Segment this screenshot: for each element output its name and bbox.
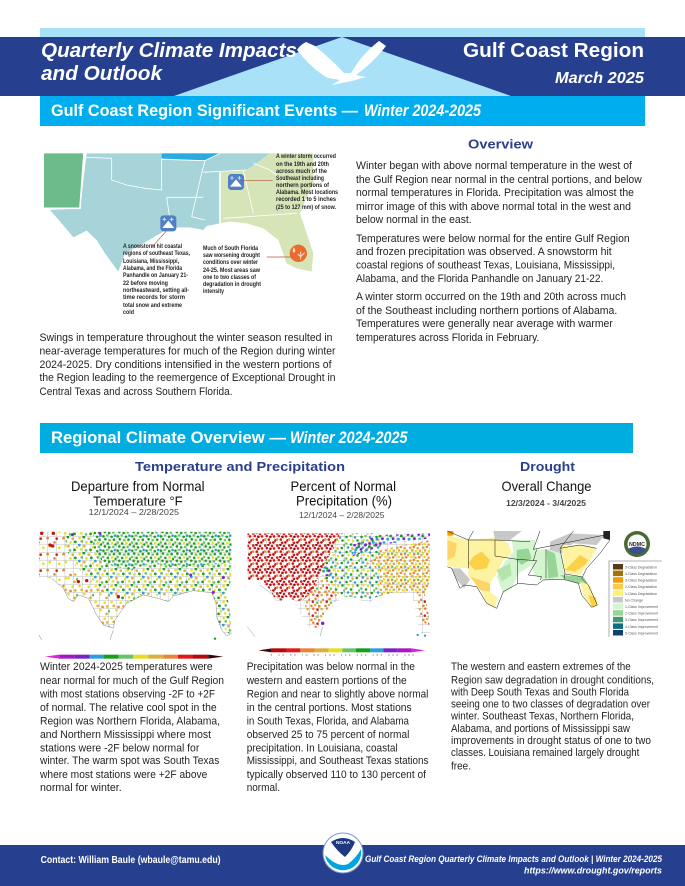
text: precipitation summary: typically observed 110 to 130 percent of: [247, 769, 427, 781]
text: drought summary: Alabama, and portions of Mississippi saw: [451, 723, 631, 735]
icon: NOAA logo: [323, 833, 363, 873]
callout: winter storm: recorded 1 to 5 inches: [276, 197, 337, 203]
text: overview: coastal regions of southeast Texas, Louisiana, Mississippi,: [356, 260, 615, 272]
text: overview: of the Southeast including northern portions of Alabama.: [356, 305, 617, 317]
callout: South Florida drought: one to two classes of: [203, 275, 257, 281]
text: drought summary: Region saw degradation in drought conditions,: [451, 674, 654, 686]
callout: South Florida drought: conditions over winter: [203, 260, 259, 266]
text: overview: Temperatures were below normal for the entire Gulf Region: [356, 233, 630, 245]
text: precipitation summary: Region and near to slightly above normal: [247, 688, 428, 700]
legend: drought classes: 4-Class Degradation: [625, 571, 657, 576]
region and date: March 2025: [555, 70, 645, 87]
callout: snowstorm: [123, 244, 190, 316]
text: drought summary: winter. Southeast Texas, Northern Florida,: [450, 710, 634, 722]
callout: winter storm: on the 19th and 20th: [276, 162, 329, 168]
legend: precipitation colour bar: 5 25 50 70 90 100 110 130 150 200 300: [271, 653, 414, 657]
callout: winter storm: Alabama. Most locations: [276, 190, 339, 196]
text: drought summary: The western and eastern extremes of the: [451, 661, 631, 673]
region and date: [463, 40, 645, 87]
text: precipitation summary: Mississippi, and Southeast Texas stations: [247, 755, 429, 767]
heading: significant events: [40, 96, 645, 126]
heading: regional climate overview: Winter 2024-2025: [290, 429, 408, 447]
callout: South Florida drought: 24-25. Most areas saw: [203, 268, 260, 274]
legend: precipitation colour bar: [258, 648, 425, 657]
heading: significant events: Winter 2024-2025: [364, 102, 482, 120]
chart title: temperature: [71, 478, 204, 517]
report title and link: [365, 854, 663, 876]
text: winter summary: near-average temperatures for much of the Region during winter: [40, 346, 336, 358]
callout: winter storm: (25 to 127 mm) of snow.: [276, 205, 336, 211]
chart title: drought: [502, 478, 592, 508]
text: overview: the Gulf Region near normal in the central portions, and below: [356, 174, 642, 186]
text: overview: and frozen precipitation was observed. A snowstorm hit: [356, 246, 612, 258]
region and date: Gulf Coast Region: [463, 40, 644, 62]
text: precipitation summary: normal.: [247, 782, 280, 794]
text: precipitation summary: precipitation. In Louisiana, coastal: [247, 742, 398, 754]
callout: snowstorm: time records for storm: [123, 295, 185, 301]
callout: snowstorm: A snowstorm hit coastal: [123, 244, 182, 250]
legend: drought classes: 2-Class Degradation: [625, 584, 657, 589]
legend: drought classes: 3-Class Improvement: [625, 617, 659, 622]
text: drought summary: free.: [451, 760, 471, 772]
heading: drought: Drought: [520, 459, 576, 474]
text: overview: Temperatures were generally near average with warmer: [356, 318, 613, 330]
text: precipitation summary: [246, 661, 429, 794]
text: precipitation summary: in South Texas, Florida, and Alabama: [247, 716, 410, 728]
chart title: precipitation: Percent of Normal: [290, 478, 396, 494]
text: overview: below normal in the east.: [356, 214, 472, 226]
icon: snow, Alabama: [228, 174, 244, 190]
chart title: precipitation: [290, 478, 396, 520]
legend: drought classes: 2-Class Improvement: [625, 611, 659, 616]
chart title: temperature: Departure from Normal: [71, 478, 204, 494]
legend: drought classes: 1-Class Degradation: [625, 591, 657, 596]
legend: drought classes: [609, 561, 662, 637]
callout: South Florida drought: saw worsening drought: [203, 253, 260, 259]
callout: winter storm: northern portions of: [276, 183, 330, 189]
text: winter summary: Swings in temperature throughout the winter season resulted in: [40, 332, 332, 344]
heading: temperature and precipitation: Temperature and Precipitation: [135, 459, 345, 474]
chart title: precipitation: Precipitation (%): [296, 492, 392, 508]
heading: regional climate overview: [40, 423, 633, 453]
text: temperature summary: of normal. The relative cool spot in the: [40, 702, 217, 714]
footer: [0, 833, 685, 886]
text: winter summary: [40, 332, 336, 398]
text: overview: mirror image of this with above normal total in the west and: [356, 201, 631, 213]
text: precipitation summary: observed 25 to 75 percent of normal: [247, 729, 409, 741]
icon: snow, Gulf coast: [160, 215, 176, 231]
callout: snowstorm: Panhandle on January 21-: [123, 273, 188, 279]
callout: snowstorm: cold: [123, 310, 134, 316]
callout: South Florida drought: degradation in drought: [203, 282, 261, 288]
map: drought change: [447, 531, 610, 608]
chart title: temperature: 12/1/2024 – 2/28/2025: [89, 507, 179, 517]
map: precipitation percent of normal: [247, 533, 431, 643]
text: overview: Alabama, and the Florida Panhandle on January 21-22.: [356, 273, 603, 285]
text: temperature summary: and Northern Mississippi where most: [40, 729, 212, 741]
text: precipitation summary: in the central portions. Most stations: [247, 702, 412, 714]
text: overview: A winter storm occurred on the 19th and 20th across much: [356, 291, 626, 303]
text: temperature summary: near normal for much of the Gulf Region: [40, 675, 224, 687]
text: overview: [356, 160, 642, 344]
chart title: temperature: Temperature °F: [93, 493, 183, 509]
title: and Outlook: [41, 63, 163, 85]
icon: NDMC logo: NDMC: [629, 542, 645, 548]
icon: drought, Florida: [290, 245, 307, 262]
legend: drought classes: 5-Class Degradation: [625, 564, 657, 570]
callout: snowstorm: 22 before moving: [123, 281, 168, 287]
text: winter summary: the Region leading to the reemergence of Exceptional Drought in: [40, 372, 336, 384]
text: precipitation summary: Precipitation was below normal in the: [247, 661, 415, 673]
legend: drought classes: 1-Class Improvement: [625, 604, 659, 609]
text: drought summary: with Deep South Texas and South Florida: [450, 686, 630, 698]
callout: snowstorm: northeastward, setting all-: [123, 288, 189, 294]
text: temperature summary: where most stations were +2F above: [39, 769, 207, 781]
text: drought summary: [450, 661, 654, 772]
callout: snowstorm: total snow and extreme: [123, 303, 183, 309]
title: Quarterly Climate Impacts: [41, 40, 297, 62]
chart title: precipitation: 12/1/2024 – 2/28/2025: [299, 510, 385, 520]
text: drought summary: classes. Louisiana remained largely drought: [451, 747, 640, 759]
title: [41, 40, 297, 85]
callout: snowstorm: Alabama, and the Florida: [123, 266, 183, 272]
callout: snowstorm: regions of southeast Texas,: [123, 251, 190, 257]
header banner: [0, 28, 685, 96]
legend: drought classes: 3-Class Degradation: [625, 578, 657, 583]
text: temperature summary: Winter 2024-2025 temperatures were: [40, 661, 213, 673]
icon: NDMC logo: [624, 531, 650, 557]
text: temperature summary: stations were -2F below normal for: [40, 742, 200, 754]
text: temperature summary: Region was Northern Florida, Alabama,: [40, 716, 220, 728]
report title and link: https://www.drought.gov/reports: [524, 866, 662, 876]
text: overview: normal temperatures in Florida. Precipitation was almost the: [356, 187, 634, 199]
text: precipitation summary: western and eastern portions of the: [246, 675, 407, 687]
icon: NOAA logo: NOAA: [336, 840, 351, 845]
chart title: drought: Overall Change: [502, 478, 592, 494]
text: overview: temperatures across Florida in February.: [356, 332, 539, 344]
heading: significant events: Gulf Coast Region Significant Events —: [51, 102, 358, 120]
text: temperature summary: winter. The warm spot was South Texas: [39, 755, 220, 767]
legend: temperature colour bar: [45, 655, 223, 659]
callout: South Florida drought: Much of South Florida: [203, 246, 259, 252]
text: drought summary: improvements in drought status of one to two: [451, 735, 651, 747]
text: drought summary: seeing one to two classes of degradation over: [451, 698, 650, 710]
legend: drought classes: 4-Class Improvement: [625, 624, 659, 629]
callout: winter storm: across much of the: [276, 169, 328, 175]
heading: overview: Overview: [468, 136, 534, 152]
text: temperature summary: normal for winter.: [40, 782, 122, 794]
callout: South Florida drought: [203, 246, 261, 295]
heading: regional climate overview: Regional Climate Overview —: [51, 429, 286, 447]
legend: drought classes: No Change: [625, 597, 644, 602]
chart title: drought: 12/3/2024 - 3/4/2025: [506, 498, 586, 508]
callout: winter storm: Southeast including: [276, 176, 324, 182]
legend: drought classes: 5-Class Improvement: [625, 630, 659, 635]
text: temperature summary: [39, 661, 224, 794]
callout: South Florida drought: intensity: [203, 289, 225, 295]
text: winter summary: 2024-2025. Dry conditions intensified in the western portions of: [40, 359, 332, 371]
callout: winter storm: [276, 154, 339, 211]
icon: white bird: [297, 41, 386, 85]
map: temperature departure: [39, 532, 232, 642]
text: temperature summary: with most stations observing -2F to +2F: [39, 688, 215, 700]
callout: snowstorm: Louisiana, Mississippi,: [123, 259, 179, 265]
text: overview: Winter began with above normal temperature in the west of: [356, 160, 633, 172]
text: winter summary: Central Texas and across Southern Florida.: [40, 386, 232, 398]
map: significant events: [44, 153, 313, 272]
contact: Contact: William Baule (wbaule@tamu.edu): [41, 855, 221, 866]
callout: winter storm: A winter storm occurred: [276, 154, 336, 160]
